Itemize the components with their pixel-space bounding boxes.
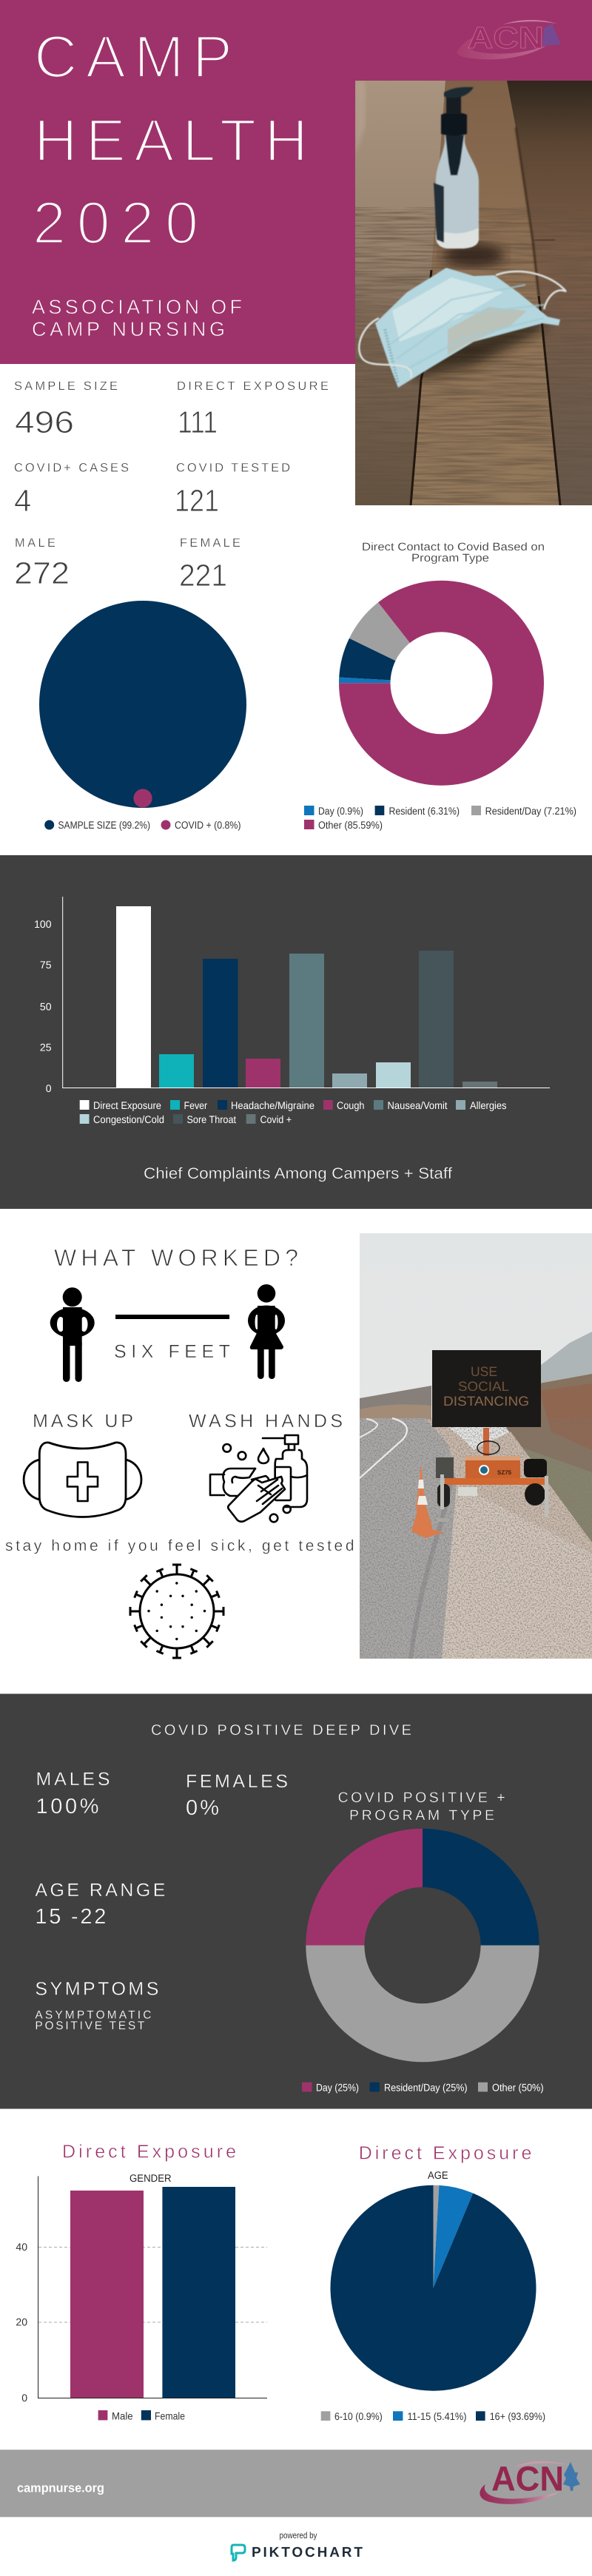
legend: direct contact: Resident (6.31%): [389, 805, 460, 817]
legend: direct contact: Day (0.9%): [318, 805, 363, 817]
bar chart: direct exposure gender: 40: [16, 2241, 27, 2253]
chart: sample size pie: [39, 601, 246, 831]
legend: chief complaints: Cough: [337, 1099, 364, 1111]
panel: header: [0, 0, 592, 364]
legend: chief complaints: [80, 1099, 506, 1125]
heading: covid positive program type: COVID POSITIVE +: [338, 1790, 505, 1806]
heading: direct contact chart: Direct Contact to Covid Based on: [362, 541, 545, 553]
stat: females: 0%: [186, 1796, 219, 1820]
legend: age: 11-15 (5.41%): [407, 2410, 466, 2422]
heading: covid positive program type: PROGRAM TYPE: [349, 1807, 494, 1824]
legend: chief complaints: Sore Throat: [186, 1113, 236, 1125]
panel: chief complaints: [0, 855, 592, 1209]
legend: chief complaints: Nausea/Vomit: [388, 1099, 448, 1111]
stat: sample size: [14, 380, 118, 439]
legend: direct contact: Resident/Day (7.21%): [485, 805, 576, 817]
subtitle: association of camp nursing: ASSOCIATION OF: [32, 296, 242, 318]
stat: female: FEMALE: [180, 536, 240, 550]
chart: direct exposure age pie: AGE: [428, 2169, 448, 2181]
icon: man figure: [50, 1287, 95, 1382]
stat: covid+ cases: 4: [14, 483, 31, 518]
panel: covid positive deep dive: [0, 1694, 592, 2108]
legend: covid positive: [302, 2082, 544, 2094]
legend: sample size: SAMPLE SIZE (99.2%): [58, 819, 150, 831]
title: camp health 2020: [33, 24, 308, 257]
heading: deep dive: COVID POSITIVE DEEP DIVE: [151, 1722, 411, 1739]
legend: age: 6-10 (0.9%): [334, 2410, 383, 2422]
stat: males: [36, 1769, 110, 1818]
link: campnurse.org: campnurse.org: [17, 2481, 104, 2495]
heading: what worked: WHAT WORKED?: [54, 1244, 298, 1271]
panel: footer band: [0, 2449, 592, 2517]
stat: covid tested: COVID TESTED: [176, 462, 290, 475]
road sign board: [432, 1350, 541, 1427]
stat: females: [186, 1771, 288, 1820]
trailer: [436, 1428, 548, 1522]
legend: chief complaints: Direct Exposure: [93, 1099, 161, 1111]
logo: ACN: [480, 2459, 580, 2504]
legend: sample size: COVID + (0.8%): [175, 819, 241, 831]
stat: covid tested: 121: [175, 483, 219, 518]
road sign board: SOCIAL: [458, 1379, 509, 1394]
heading: direct exposure age: Direct Exposure: [359, 2142, 531, 2163]
shadow of bottle: [443, 243, 505, 267]
stat: sample size: SAMPLE SIZE: [14, 380, 118, 393]
bar chart: direct exposure gender: GENDER: [130, 2172, 172, 2184]
label: mask up: MASK UP: [33, 1411, 133, 1432]
legend: direct contact: Other (85.59%): [318, 819, 383, 831]
icon: virus: [130, 1565, 223, 1658]
caption: chief complaints: Chief Complaints Among Campers + Staff: [144, 1165, 452, 1182]
stat: males: 100%: [36, 1795, 99, 1818]
bar chart: chief complaints: 0: [46, 1082, 52, 1094]
legend: covid positive: Resident/Day (25%): [384, 2082, 468, 2094]
photo: use social distancing road sign: [360, 1233, 592, 1659]
heading: direct contact chart: Program Type: [411, 552, 489, 564]
traffic cones: [411, 1464, 444, 1538]
chart: direct exposure age pie: [321, 2169, 545, 2422]
stat: symptoms: ASYMPTOMATIC: [35, 2009, 151, 2021]
legend: gender: Male: [112, 2410, 133, 2422]
stat: covid+ cases: [14, 462, 129, 518]
legend: chief complaints: Fever: [184, 1099, 207, 1111]
legend: chief complaints: Allergies: [470, 1099, 506, 1111]
stat: covid+ cases: COVID+ CASES: [14, 462, 129, 475]
chart: direct contact donut: [339, 581, 544, 786]
stat: age range: AGE RANGE: [35, 1880, 165, 1901]
stat: female: [179, 536, 240, 593]
heading: direct exposure gender: Direct Exposure: [62, 2141, 236, 2162]
road sign board: USE: [471, 1364, 497, 1379]
icon: washing hands with soap: [210, 1435, 307, 1522]
heading: direct contact chart: [362, 541, 545, 564]
arrow: six feet distance line: [115, 1315, 229, 1319]
label: wash hands: WASH HANDS: [189, 1411, 343, 1432]
logo: ACN faded: ACN: [468, 21, 544, 55]
photo: hand sanitizer and face mask on wood: [355, 81, 592, 505]
legend: gender: [98, 2410, 185, 2422]
stat: male: MALE: [15, 536, 56, 550]
stat: male: [14, 536, 70, 590]
stat: direct exposure: [177, 380, 329, 439]
legend: covid positive: Other (50%): [492, 2082, 544, 2094]
stat: sample size: 496: [15, 405, 74, 439]
stat: age range: 15 -22: [35, 1905, 106, 1929]
bar chart: chief complaints: 25: [40, 1042, 52, 1053]
text: stay home advice: stay home if you feel sick, get tested: [5, 1537, 354, 1554]
subtitle: association of camp nursing: [32, 296, 242, 340]
bar chart: chief complaints: [34, 897, 550, 1094]
trailer: SZ75: [497, 1469, 512, 1476]
stat: direct exposure: 111: [178, 405, 218, 439]
legend: chief complaints: Covid +: [260, 1113, 292, 1125]
legend: age: [321, 2410, 545, 2422]
legend: gender: Female: [155, 2410, 185, 2422]
legend: covid positive: Day (25%): [316, 2082, 359, 2094]
bar chart: direct exposure gender: 0: [21, 2392, 27, 2404]
label: six feet: SIX FEET: [114, 1341, 230, 1362]
bar chart: direct exposure gender: 20: [16, 2316, 27, 2327]
icon: woman figure: [248, 1284, 285, 1379]
stat: males: MALES: [36, 1769, 110, 1790]
stat: covid tested: [175, 462, 290, 518]
shadow of mask: [414, 317, 544, 379]
stat: symptoms: POSITIVE TEST: [35, 2020, 145, 2032]
subtitle: association of camp nursing: CAMP NURSING: [32, 318, 225, 340]
legend: chief complaints: Headache/Migraine: [231, 1099, 314, 1111]
icon: face mask: [24, 1443, 141, 1517]
title: camp health 2020: 2020: [33, 190, 198, 257]
stat: female: 221: [179, 558, 227, 593]
logo: piktochart: PIKTOCHART: [252, 2545, 363, 2560]
chart: covid positive donut: [306, 1829, 539, 2062]
legend: direct contact: [304, 805, 576, 831]
title: camp health 2020: HEALTH: [34, 108, 308, 175]
bar chart: chief complaints: 75: [40, 959, 52, 971]
legend: sample size: [44, 819, 240, 831]
bottle: [434, 87, 479, 249]
title: camp health 2020: CAMP: [34, 24, 232, 91]
stat: symptoms: [35, 1978, 158, 2032]
logo: ACN: ACN: [491, 2459, 564, 2498]
stat: females: FEMALES: [186, 1771, 288, 1792]
bar chart: chief complaints: 100: [34, 918, 52, 930]
stat: male: 272: [14, 556, 70, 590]
bar chart: direct exposure gender: [16, 2172, 267, 2422]
heading: covid positive program type: [338, 1790, 505, 1824]
legend: chief complaints: Congestion/Cold: [93, 1113, 164, 1125]
road sign board: DISTANCING: [443, 1394, 529, 1409]
legend: age: 16+ (93.69%): [490, 2410, 545, 2422]
credit: powered by: powered by: [280, 2530, 317, 2540]
face mask: [359, 268, 566, 388]
logo: ACN faded: [457, 20, 561, 59]
stat: direct exposure: DIRECT EXPOSURE: [177, 380, 329, 393]
bar chart: chief complaints: 50: [40, 1000, 52, 1012]
stat: symptoms: SYMPTOMS: [35, 1978, 158, 1999]
stat: age range: [35, 1880, 165, 1929]
